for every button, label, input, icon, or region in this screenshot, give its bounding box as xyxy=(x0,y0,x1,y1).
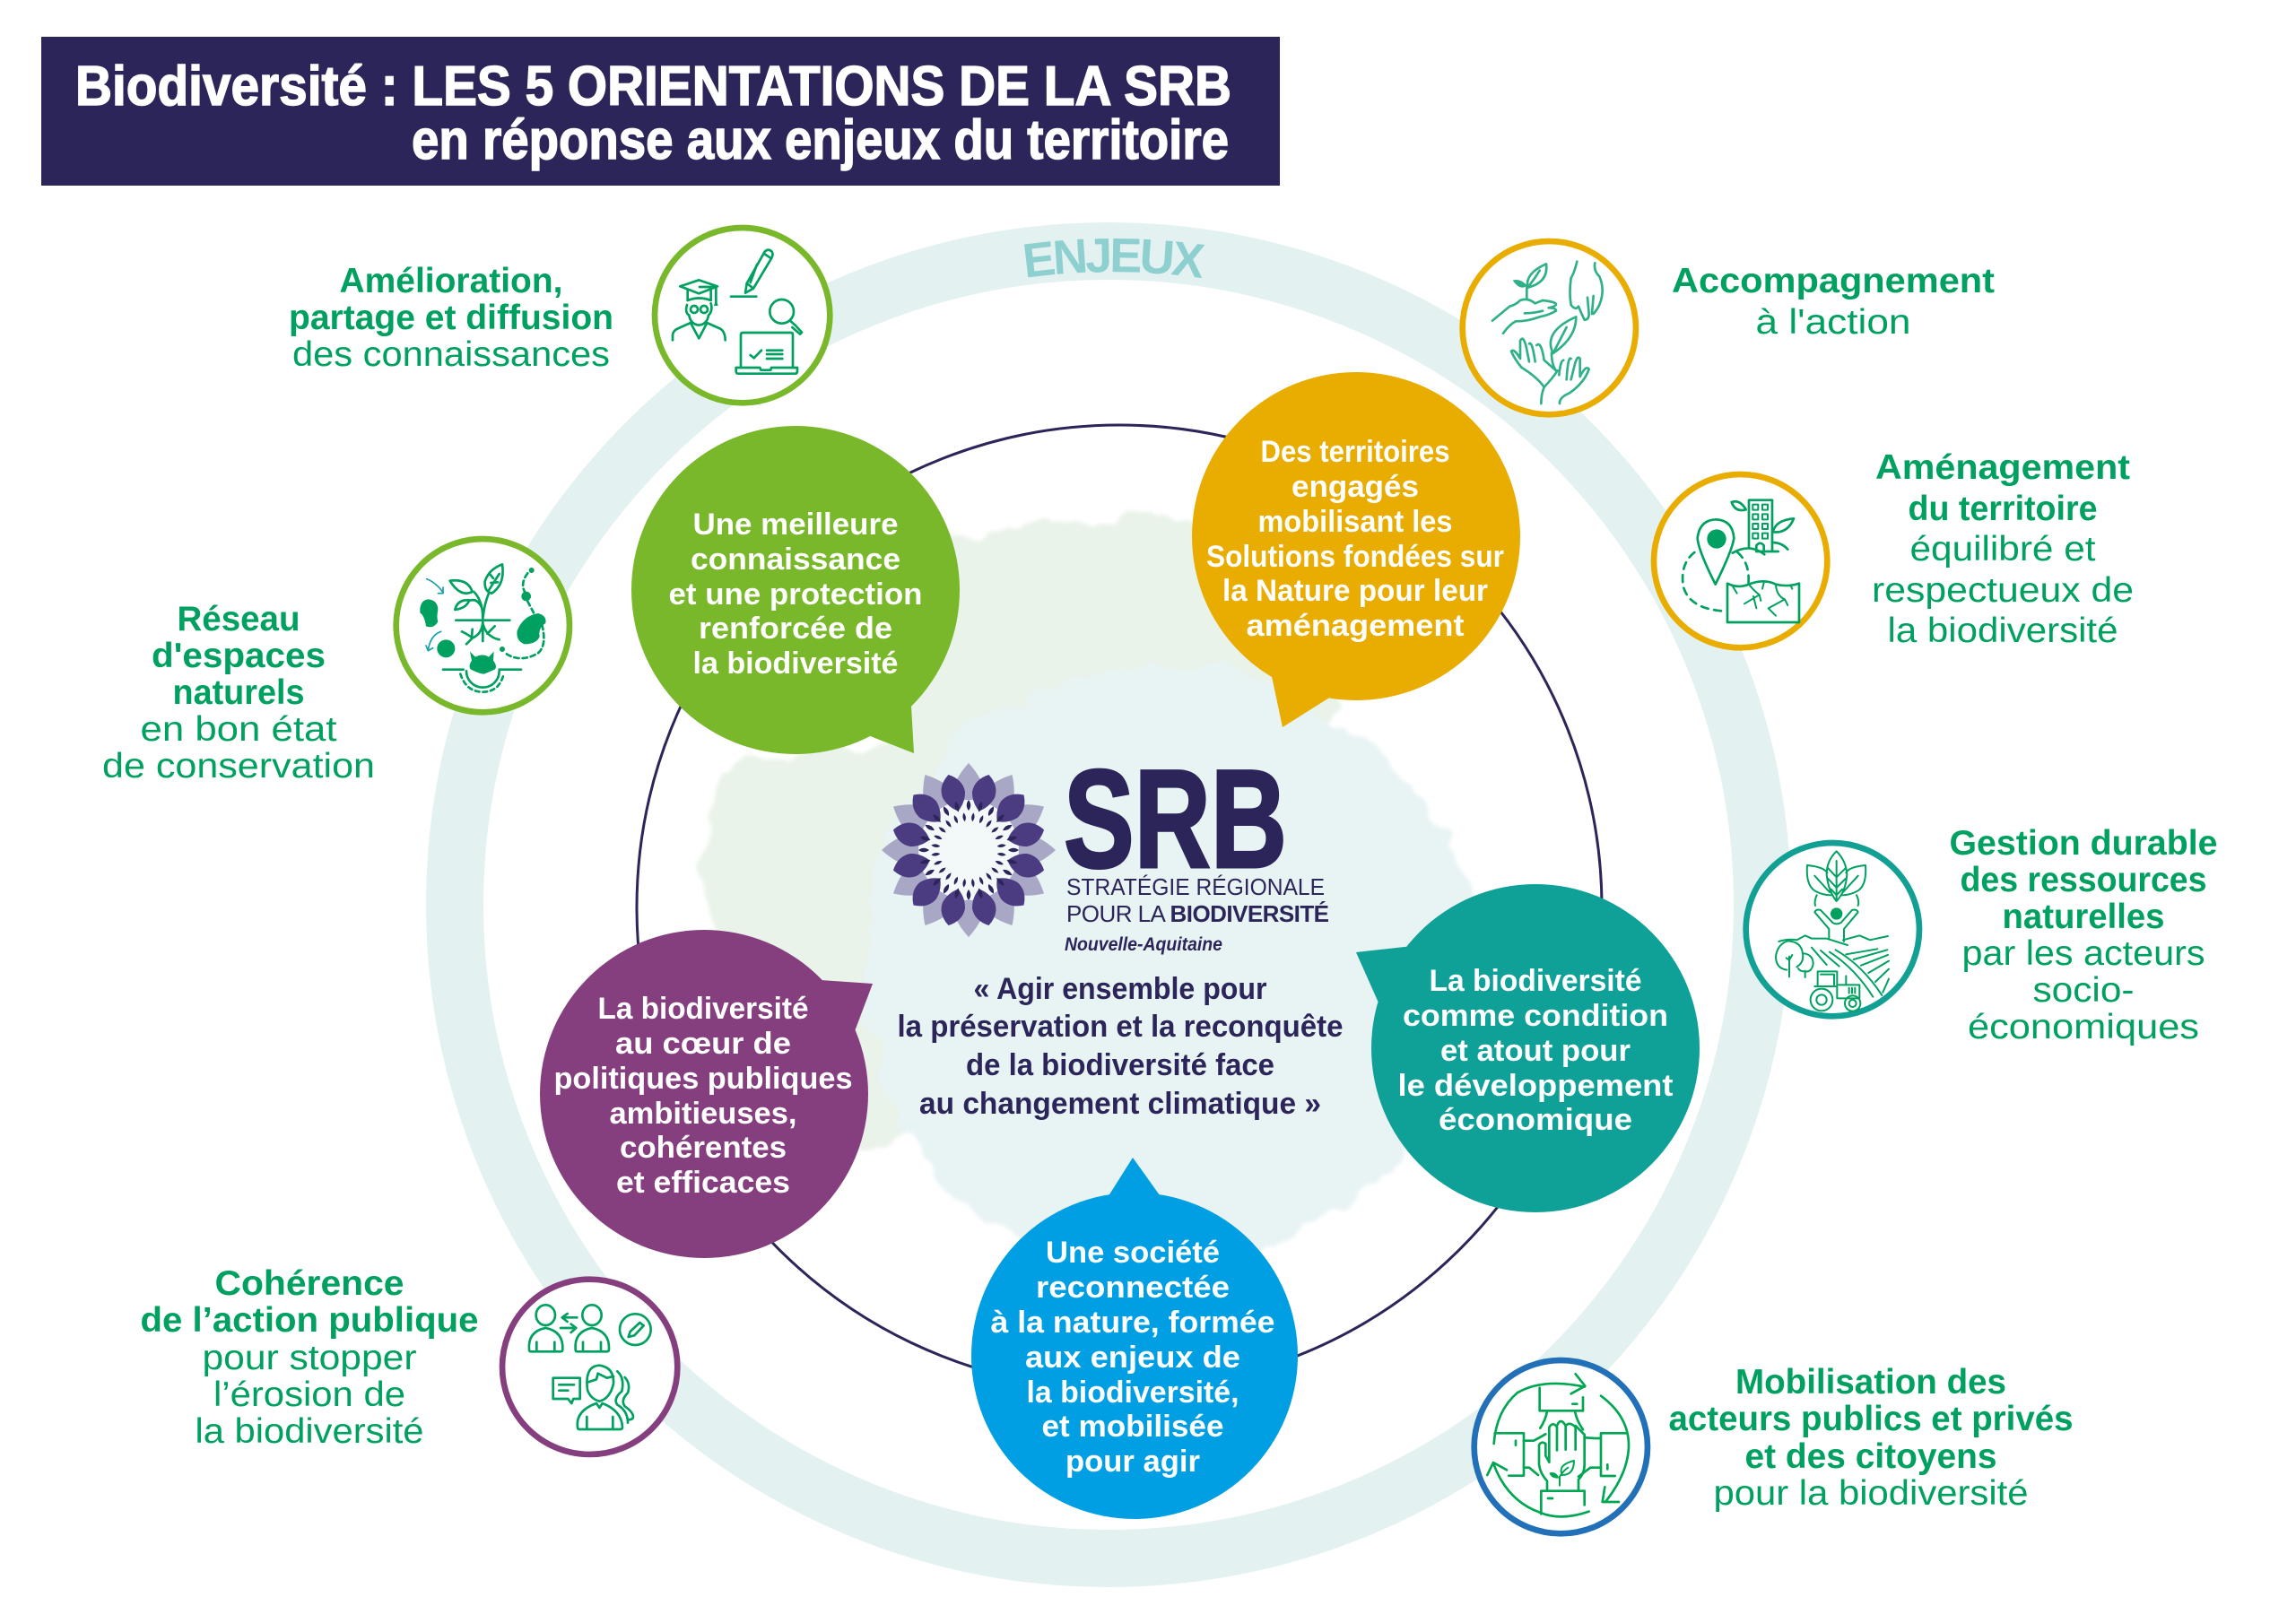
label: réseau: naturels xyxy=(172,673,305,712)
bubble: connaissance: renforcée de xyxy=(699,612,892,646)
label: réseau: en bon état xyxy=(140,710,337,749)
label: réseau: d'espaces xyxy=(152,637,326,675)
logo subtitle: STRATÉGIE RÉGIONALE xyxy=(1066,873,1325,900)
bubble: politiques publiques: et efficaces xyxy=(616,1166,790,1200)
bubble: société: reconnectée xyxy=(1036,1271,1230,1305)
bubble: politiques publiques: ambitieuses, xyxy=(610,1097,796,1131)
label: accompagnement xyxy=(1672,262,1995,342)
watercolour background xyxy=(704,515,1471,1269)
label: gestion durable xyxy=(1950,824,2217,1046)
bubble: connaissance xyxy=(631,426,960,754)
central quote: au changement climatique » xyxy=(919,1087,1321,1121)
bubble: économie: le développement xyxy=(1397,1069,1674,1103)
label: aménagement: respectueux de xyxy=(1872,571,2134,610)
label: mobilisation: pour la biodiversité xyxy=(1713,1474,2029,1513)
bubble: territoires: engagés xyxy=(1292,470,1419,504)
bubble: politiques publiques: politiques publiques xyxy=(554,1062,852,1096)
label: aménagement: équilibré et xyxy=(1910,530,2096,568)
label: connaissances: des connaissances xyxy=(292,335,610,374)
label: gestion durable: par les acteurs xyxy=(1962,934,2205,973)
bubble: politiques publiques: au cœur de xyxy=(615,1027,791,1061)
label: cohérence: de l’action publique xyxy=(140,1301,479,1340)
icon: aménagement xyxy=(1654,474,1827,647)
bubble: territoires: aménagement xyxy=(1247,609,1464,643)
bubble: société: à la nature, formée xyxy=(990,1306,1275,1340)
bubble: économie: La biodiversité xyxy=(1430,964,1641,998)
bubble: connaissance: connaissance xyxy=(691,542,900,577)
bubble: économie: comme condition xyxy=(1403,999,1668,1033)
label: accompagnement: à l'action xyxy=(1756,303,1910,342)
label: gestion durable: socio- xyxy=(2032,971,2135,1010)
bubble: connaissance: Une meilleure xyxy=(692,508,899,542)
bubble: territoires: Des territoires xyxy=(1261,435,1449,469)
central quote xyxy=(897,972,1344,1121)
bubble: territoires: mobilisant les xyxy=(1257,505,1453,539)
icon: gestion durable xyxy=(1746,843,1919,1016)
bubble: société: pour agir xyxy=(1065,1445,1200,1479)
bubble: connaissance: et une protection xyxy=(669,577,922,612)
label: aménagement: la biodiversité xyxy=(1887,612,2118,650)
label: cohérence xyxy=(140,1264,479,1451)
label: gestion durable: des ressources xyxy=(1961,861,2206,899)
enjeux label: ENJEUX xyxy=(1024,239,1205,278)
icon: flower emblem xyxy=(882,763,1056,937)
label: aménagement: Aménagement xyxy=(1875,448,2130,487)
label: gestion durable: naturelles xyxy=(2002,898,2165,936)
bubble: territoires: Solutions fondées sur xyxy=(1206,540,1504,574)
label: mobilisation: acteurs publics et privés xyxy=(1668,1400,2074,1438)
label: réseau: Réseau xyxy=(178,600,300,638)
label: aménagement xyxy=(1872,448,2134,650)
bubble: politiques publiques: La biodiversité xyxy=(597,992,809,1026)
bubble: territoires xyxy=(1192,372,1520,727)
label: réseau xyxy=(102,600,375,785)
bubble: politiques publiques: cohérentes xyxy=(620,1131,787,1165)
logo region: Nouvelle-Aquitaine xyxy=(1065,934,1222,955)
label: connaissances xyxy=(289,262,613,374)
icon: cohérence xyxy=(502,1280,677,1454)
label: cohérence: pour stopper xyxy=(203,1339,417,1377)
SRB letters: SRB xyxy=(1064,742,1287,898)
bubble: société: Une société xyxy=(1046,1236,1220,1270)
label: mobilisation xyxy=(1668,1363,2074,1513)
central quote: de la biodiversité face xyxy=(966,1048,1274,1082)
label: mobilisation: et des citoyens xyxy=(1745,1437,1996,1476)
icon: connaissances xyxy=(655,228,830,403)
bubble: économie xyxy=(1356,884,1700,1212)
label: aménagement: du territoire xyxy=(1909,490,2097,528)
label: cohérence: Cohérence xyxy=(215,1264,404,1303)
title banner xyxy=(41,37,1280,186)
central quote: la préservation et la reconquête xyxy=(897,1010,1344,1044)
logo: SRB: POUR LA BIODIVERSITÉ xyxy=(1066,900,1329,927)
label: réseau: de conservation xyxy=(102,747,375,785)
bubble: politiques publiques xyxy=(540,930,873,1258)
icon: accompagnement xyxy=(1463,241,1636,414)
label: gestion durable: économiques xyxy=(1968,1008,2199,1046)
label: cohérence: l’érosion de xyxy=(213,1376,405,1414)
label: connaissances: Amélioration, xyxy=(339,262,563,300)
label: mobilisation: Mobilisation des xyxy=(1735,1363,2006,1402)
bubble: économie: économique xyxy=(1439,1103,1632,1137)
orbit circle xyxy=(637,425,1602,1390)
title line 1: Biodiversité : LES 5 ORIENTATIONS DE LA SRB xyxy=(75,56,1231,117)
icon: mobilisation xyxy=(1474,1360,1648,1533)
central quote: « Agir ensemble pour xyxy=(974,972,1266,1006)
label: connaissances: partage et diffusion xyxy=(289,299,613,337)
bubble: société: et mobilisée xyxy=(1042,1410,1223,1444)
icon: réseau d'espaces naturels xyxy=(396,539,570,712)
bubble: connaissance: la biodiversité xyxy=(692,647,899,681)
bubble: société: aux enjeux de xyxy=(1025,1341,1240,1375)
label: cohérence: la biodiversité xyxy=(196,1412,423,1451)
bubble: économie: et atout pour xyxy=(1440,1034,1631,1068)
title line 2: en réponse aux enjeux du territoire xyxy=(412,109,1229,171)
logo: SRB xyxy=(882,742,1329,955)
enjeux ring xyxy=(426,222,1789,1587)
label: gestion durable: Gestion durable xyxy=(1950,824,2217,863)
label: accompagnement: Accompagnement xyxy=(1672,262,1995,300)
bubble: société xyxy=(971,1158,1298,1519)
bubble: territoires: la Nature pour leur xyxy=(1222,574,1488,608)
bubble: société: la biodiversité, xyxy=(1026,1376,1239,1410)
